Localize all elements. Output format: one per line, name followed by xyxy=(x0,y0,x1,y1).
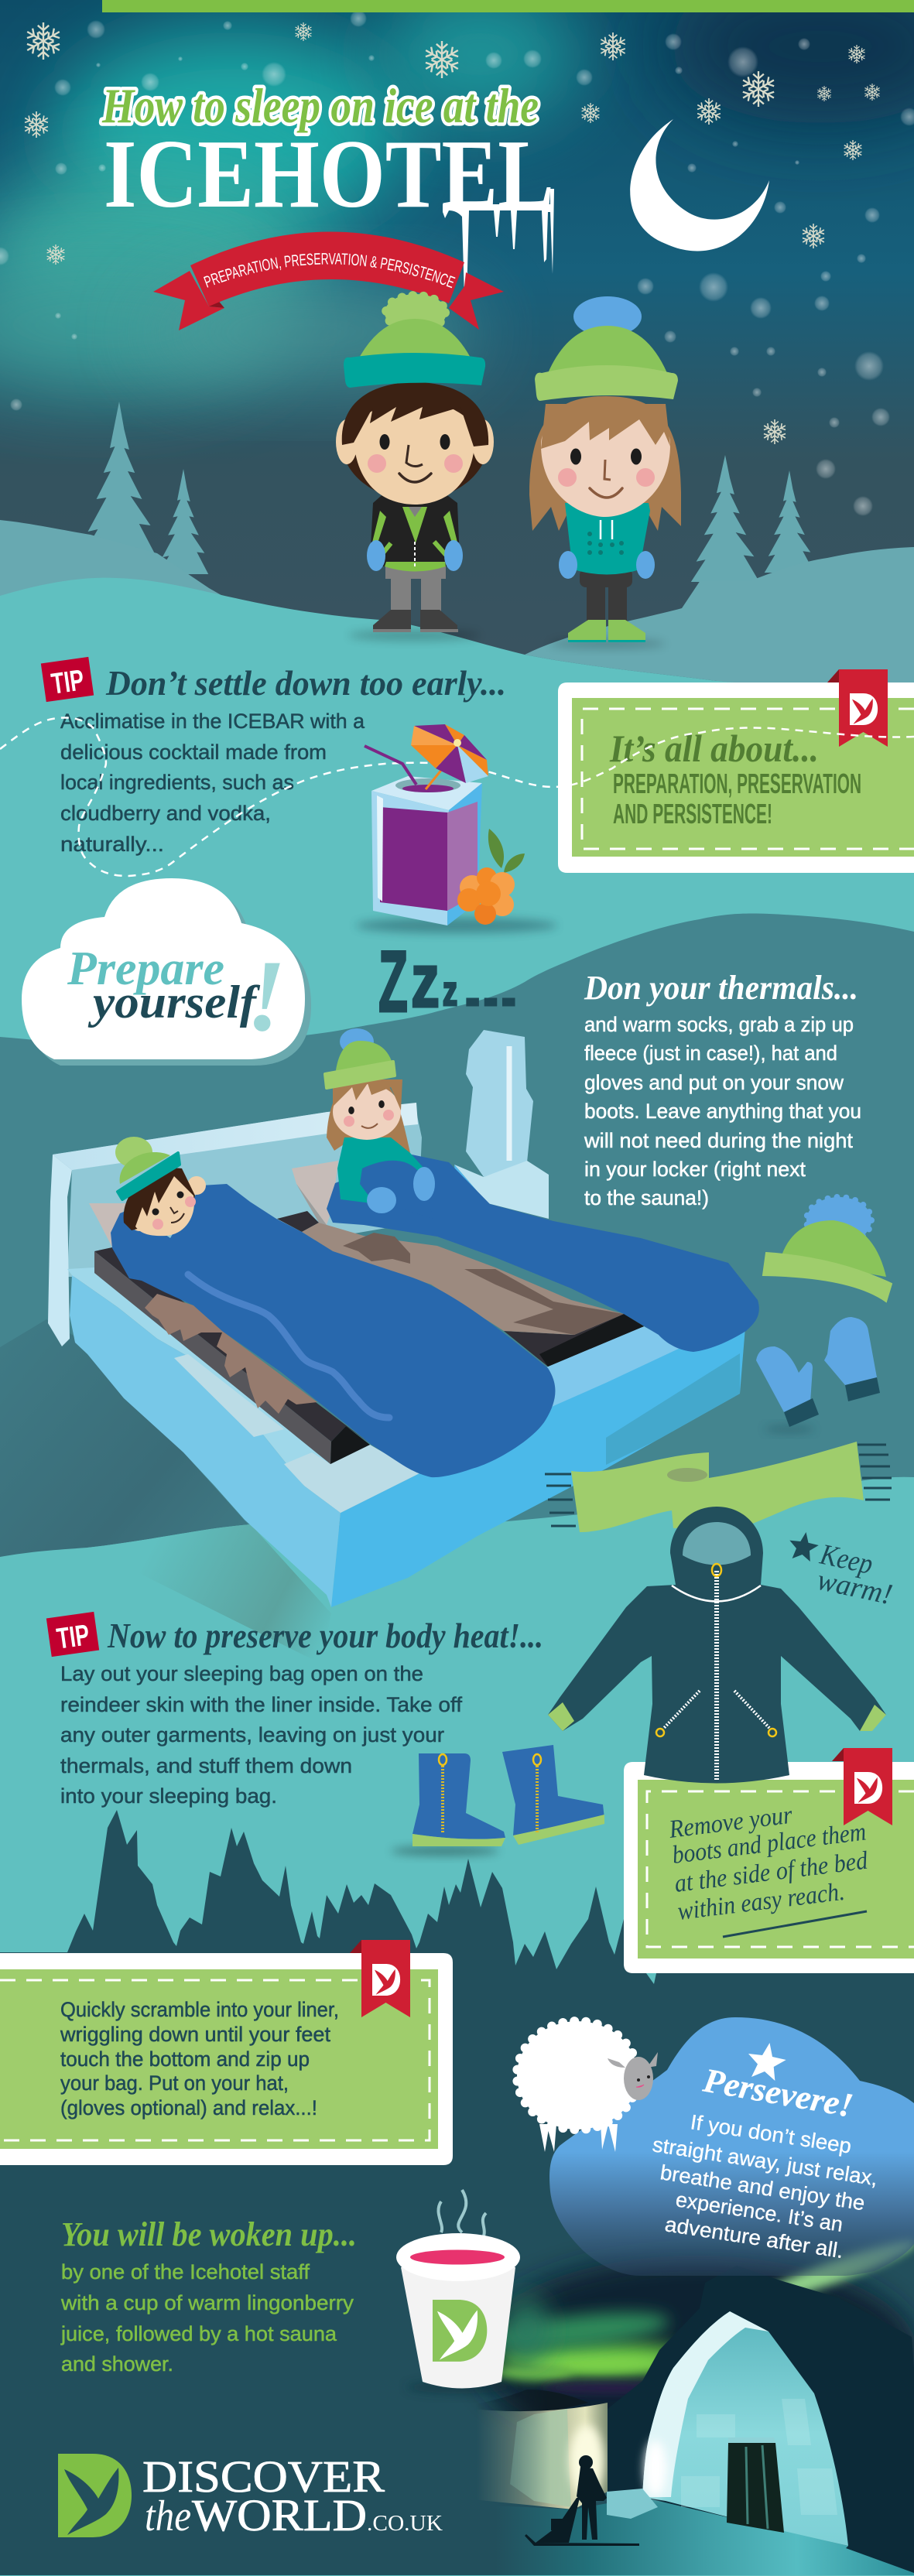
icicles xyxy=(443,189,554,298)
text: don your thermals: and warm socks, grab a zip up xyxy=(584,1013,854,1036)
text: acclimatise: delicious cocktail made from xyxy=(60,741,327,764)
panel text: wriggling down until your feet xyxy=(60,2023,330,2046)
text: acclimatise: local ingredients, such as xyxy=(60,771,294,794)
bed shadow on teal xyxy=(87,1524,331,1664)
persevere text: breathe and enjoy the xyxy=(659,2160,867,2215)
text: You will be woken up: juice, followed by a hot sauna xyxy=(60,2322,337,2345)
ice sculpture xyxy=(466,1030,533,1177)
reindeer fur left xyxy=(145,1294,317,1414)
heading: preserve body heat: Now to preserve your body heat!... xyxy=(107,1616,543,1655)
section: lower teal wave xyxy=(0,1477,914,1981)
bookmark icon xyxy=(350,1940,410,2017)
trees xyxy=(82,402,814,582)
text: acclimatise xyxy=(60,710,365,856)
icon: mittens xyxy=(756,1317,880,1433)
logo: Discover the World xyxy=(58,2451,443,2540)
panel text: (gloves optional) and relax...! xyxy=(60,2096,317,2119)
boy character xyxy=(336,294,494,641)
leaves xyxy=(488,829,525,873)
snow bokeh xyxy=(0,10,914,516)
panel text: Quickly scramble into your liner, xyxy=(60,1998,339,2021)
remove boots text: Remove your xyxy=(667,1801,794,1844)
panel: it's all about xyxy=(558,669,914,873)
heading: don't settle down: Don’t settle down too early... xyxy=(105,663,506,703)
remove boots text: boots and place them xyxy=(671,1818,868,1870)
tip tag 2 xyxy=(46,1612,99,1657)
zzz: z xyxy=(443,968,457,1014)
persevere text: experience. It’s an xyxy=(674,2188,844,2236)
bookmark icon xyxy=(827,669,888,747)
bed ice left face xyxy=(70,1275,341,1607)
logo: Discover the World: .CO.UK xyxy=(367,2512,443,2536)
panel: remove your boots xyxy=(624,1748,914,1973)
logo: Discover the World: DISCOVER xyxy=(142,2451,385,2502)
persevere text: adventure after all. xyxy=(663,2212,845,2263)
icon: cup of lingonberry juice xyxy=(396,2190,520,2393)
panel text: AND PERSISTENCE! xyxy=(613,798,772,830)
panel text: your bag. Put on your hat, xyxy=(60,2071,289,2095)
zzz: z xyxy=(411,938,440,1023)
person with sled xyxy=(525,2455,639,2546)
text: don your thermals: fleece (just in case!), hat and xyxy=(584,1042,837,1065)
top green bar xyxy=(102,0,914,12)
hill: front xyxy=(0,578,914,774)
boy sleeping bag xyxy=(111,1184,555,1477)
cocktail xyxy=(356,724,557,933)
tip tag 1 xyxy=(41,657,94,702)
text: sleeping bag: thermals, and stuff them down xyxy=(60,1754,352,1777)
text: don your thermals: boots. Leave anything that you xyxy=(584,1100,861,1123)
panel text xyxy=(613,768,861,830)
text: acclimatise: naturally... xyxy=(60,833,164,856)
text: acclimatise: cloudberry and vodka, xyxy=(60,802,271,825)
mittens xyxy=(367,1187,396,1213)
text: sleeping bag xyxy=(60,1662,463,1808)
hill: back right xyxy=(525,547,914,708)
pillows xyxy=(89,1203,126,1247)
straw xyxy=(365,746,416,785)
boy in bed xyxy=(115,1137,206,1236)
cloud: prepare yourself: ! xyxy=(246,939,286,1052)
cloudberries xyxy=(457,867,515,925)
zzz xyxy=(378,933,518,1030)
keep warm note xyxy=(789,1532,895,1611)
icon: sheep xyxy=(517,2021,658,2152)
panel: quickly scramble xyxy=(0,1940,453,2165)
moon xyxy=(630,119,769,251)
icon: boots xyxy=(391,1745,604,1856)
ribbon banner xyxy=(153,232,504,330)
text: sleeping bag: any outer garments, leaving on just your xyxy=(60,1723,444,1746)
bed shadow xyxy=(0,1319,331,1617)
text: don your thermals: in your locker (right next xyxy=(584,1158,806,1181)
text: don your thermals: to the sauna!) xyxy=(584,1186,709,1209)
bed ice right face xyxy=(331,1318,746,1607)
tip tag 2: TIP xyxy=(55,1619,91,1656)
persevere text: Persevere! xyxy=(700,2061,856,2125)
persevere text: straight away, just relax, xyxy=(651,2133,879,2190)
icon: star xyxy=(748,2043,786,2081)
remove boots text: at the side of the bed xyxy=(673,1847,870,1898)
mattress slab right xyxy=(504,1314,644,1367)
sleeping bag stripe xyxy=(188,1274,389,1418)
panel: persevere cloud xyxy=(549,2017,914,2276)
text: You will be woken up: by one of the Icehotel staff xyxy=(61,2260,310,2284)
ribbon text: PREPARATION, PRESERVATION & PERSISTENCE xyxy=(204,253,455,288)
text: You will be woken up: You will be woken up... xyxy=(61,2215,357,2253)
text: don your thermals xyxy=(584,1013,861,1209)
headboard xyxy=(53,1112,422,1277)
heading: It’s all about... xyxy=(609,727,819,770)
text: sleeping bag: Lay out your sleeping bag open on the xyxy=(60,1662,423,1685)
bed ice left top xyxy=(67,1267,419,1513)
bookmark icon xyxy=(832,1748,892,1825)
panel text xyxy=(60,1998,339,2119)
cocktail umbrella xyxy=(411,724,488,783)
keep warm note: warm! xyxy=(814,1564,895,1611)
zzz: ... xyxy=(464,968,518,1014)
icon: green hat xyxy=(763,1197,892,1302)
cup logo xyxy=(433,2300,487,2362)
reindeer fur between bags xyxy=(302,1223,624,1335)
bed ice right top xyxy=(410,1326,682,1473)
icon: scarf xyxy=(545,1442,892,1532)
text: sleeping bag: into your sleeping bag. xyxy=(60,1784,277,1808)
section: mid dark wave xyxy=(0,914,914,1625)
zzz: Z xyxy=(378,933,408,1030)
persevere text: If you don’t sleep xyxy=(689,2110,853,2158)
mattress slab left xyxy=(94,1247,371,1445)
cloud: prepare yourself: yourself xyxy=(88,977,260,1028)
logo: Discover the World: WORLD xyxy=(192,2490,367,2540)
text: don your thermals: gloves and put on your snow xyxy=(584,1071,844,1094)
girl sleeping bag xyxy=(327,1154,759,1352)
text: You will be woken up xyxy=(60,2215,357,2376)
ice bed xyxy=(48,1028,759,1607)
text: You will be woken up: and shower. xyxy=(61,2352,173,2376)
girl in bed xyxy=(325,1028,435,1219)
photo: ice hotel at night xyxy=(472,2232,914,2576)
remove boots text: within easy reach. xyxy=(676,1878,846,1926)
title ICEHOTEL: ICEHOTEL xyxy=(104,121,554,228)
keep warm note: Keep xyxy=(816,1538,875,1581)
logo: Discover the World: the xyxy=(145,2492,191,2540)
text: You will be woken up: with a cup of warm lingonberry xyxy=(60,2291,354,2314)
heading: don your thermals: Don your thermals... xyxy=(584,969,858,1007)
cloud: prepare yourself: Prepare xyxy=(67,942,224,995)
background: night sky with aurora xyxy=(0,0,914,681)
persevere text xyxy=(651,2061,879,2263)
dashed trail xyxy=(0,717,914,876)
girl character xyxy=(529,296,681,648)
tip tag 1: TIP xyxy=(50,664,86,701)
text: sleeping bag: reindeer skin with the liner inside. Take off xyxy=(60,1693,463,1716)
text: don your thermals: will not need during the night xyxy=(584,1129,853,1152)
hill: back left xyxy=(0,520,263,619)
text: acclimatise: Acclimatise in the ICEBAR with a xyxy=(60,710,365,733)
cloud: prepare yourself xyxy=(22,878,311,1066)
snowflakes xyxy=(23,22,881,444)
panel: bottom dark mountains section xyxy=(0,1810,914,2576)
title script: How to sleep on ice at the xyxy=(101,78,539,133)
panel text: touch the bottom and zip up xyxy=(60,2047,310,2071)
icon: jacket xyxy=(548,1507,886,1783)
remove boots text xyxy=(667,1801,870,1926)
